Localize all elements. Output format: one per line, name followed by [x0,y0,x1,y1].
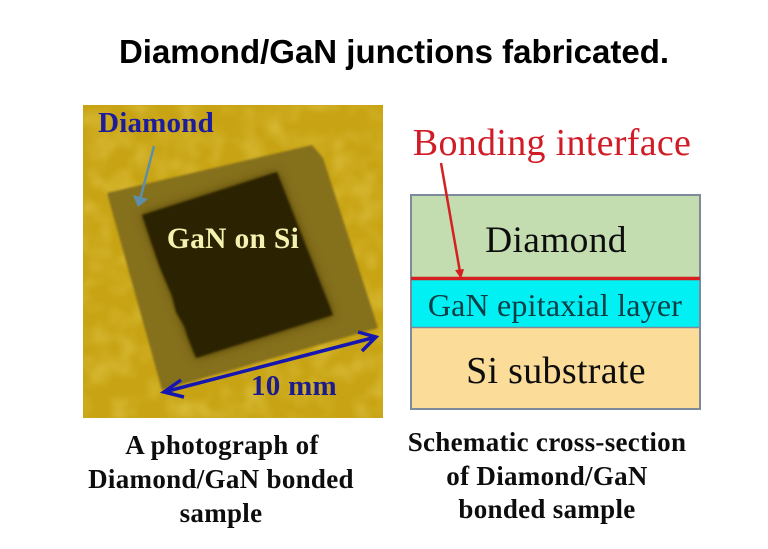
GaN on Si chip [142,172,333,358]
label: Diamond: Diamond [98,107,214,139]
layer: Diamond [411,195,700,278]
layer: GaN epitaxial [411,280,700,327]
panel: photograph of sample [83,105,383,418]
caption: photograph: sample [180,498,262,528]
caption: cross-section: Schematic cross-section [408,427,686,457]
label: Bonding interface: Bonding interface [413,122,691,164]
panel: schematic cross-section [411,163,700,409]
diamond plate [107,145,378,390]
layer: Si substrate [411,328,700,409]
caption: photograph: A photograph of [125,430,319,460]
caption: cross-section: of Diamond/GaN [446,461,648,491]
title: Diamond/GaN junctions fabricated. [119,33,669,70]
label: Diamond layer: Diamond [485,220,627,261]
label: 10 mm: 10 mm [251,370,337,402]
label: GaN layer: GaN epitaxial layer [428,287,682,323]
arrow: to bonding interface [441,163,464,279]
label: Si layer: Si substrate [466,350,646,392]
bonding line [411,277,700,280]
caption: cross-section: bonded sample [458,494,636,524]
caption: photograph: Diamond/GaN bonded [88,464,354,494]
caption: photograph [88,430,354,528]
label: GaN on Si: GaN on Si [167,223,299,255]
arrow: to diamond plate [133,146,154,207]
caption: cross-section [408,427,686,524]
frame [411,195,700,409]
plate shading [142,172,333,358]
arrow: 10 mm span [164,332,376,397]
photo background [83,105,383,418]
